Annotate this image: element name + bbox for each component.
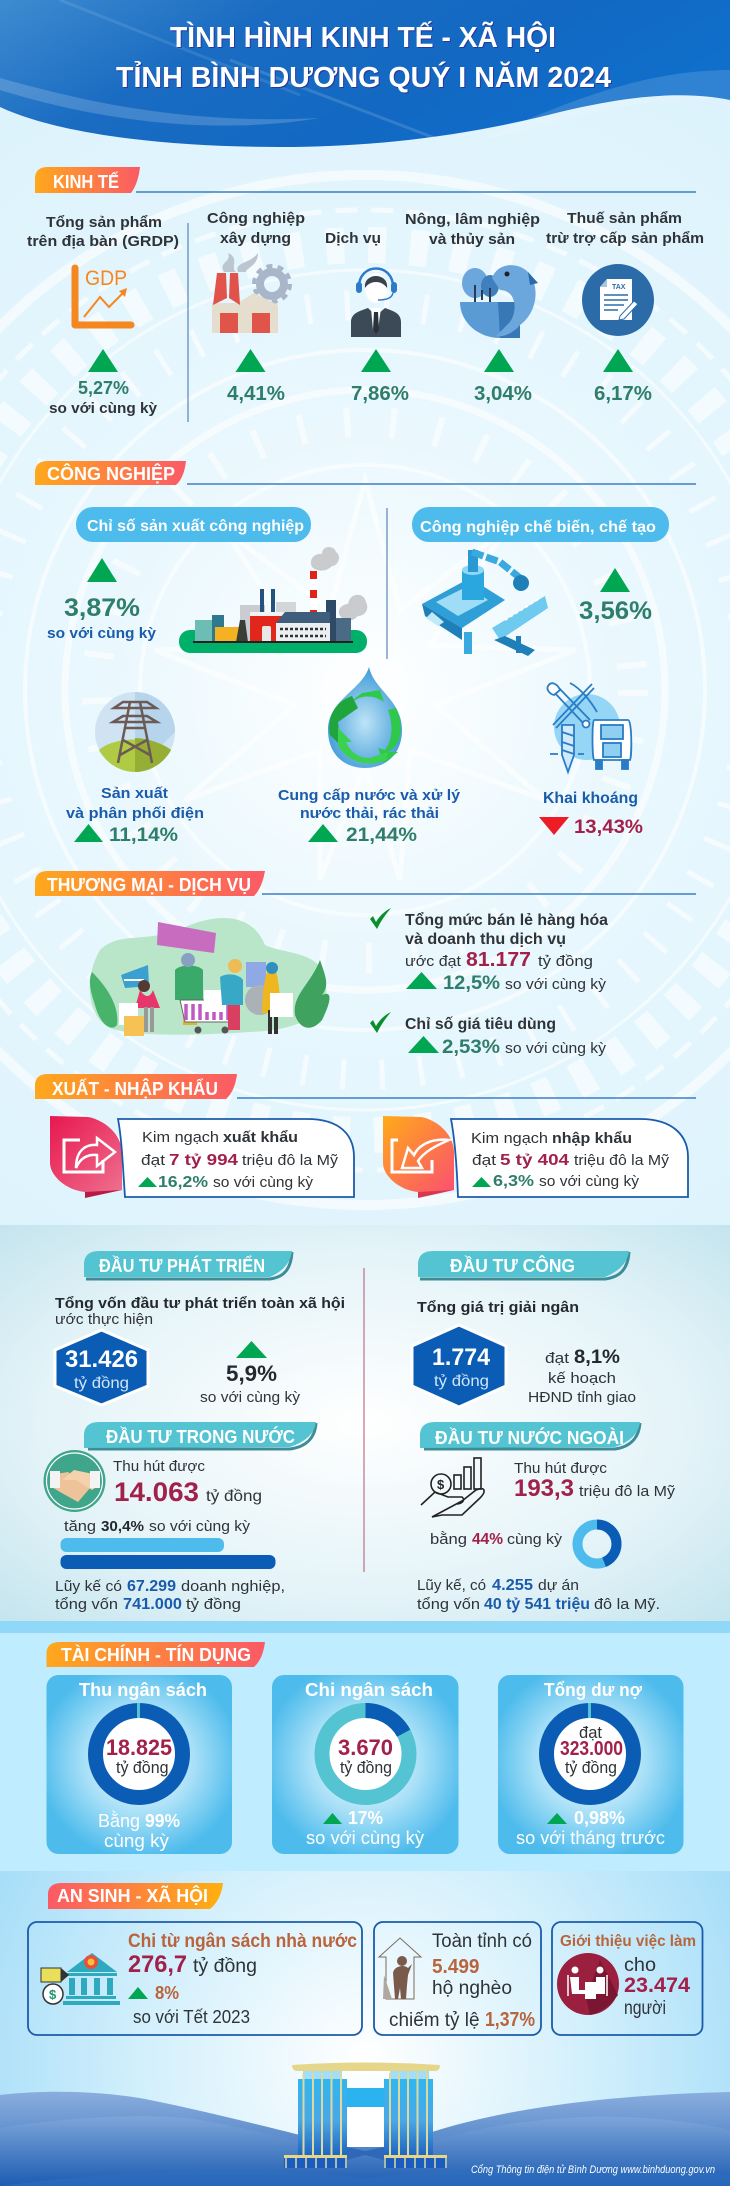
panel: GRDP [27,214,179,417]
panel: bán lẻ: 12,5% [443,973,500,994]
panel: đầu tư nước ngoài: đô la Mỹ. [594,1596,660,1613]
card: chi ngân sách [272,1675,458,1854]
panel: đầu tư trong nước: Thu hút được [113,1458,205,1475]
section heading: THƯƠNG MẠI - DỊCH VỤ [35,871,696,896]
panel: giới thiệu việc làm: 23.474 [624,1974,690,1997]
panel: bán lẻ [370,908,608,994]
panel: nhập khẩu: 5 tỷ 404 [500,1152,569,1169]
panel: công nghiệp chế biến, chế tạo: Công nghiệp chế biến, chế tạo [420,519,656,536]
panel: thuế sản phẩm: 6,17% [594,383,652,405]
donut chart [546,1703,634,1798]
panel: công nghiệp xây dựng: Công nghiệp [207,210,305,227]
panel: bán lẻ: so với cùng kỳ [505,976,607,993]
card: thu ngân sách [46,1675,232,1854]
icon: handshake [44,1450,106,1512]
panel: đầu tư phát triển: Tổng vốn đầu tư phát triển toàn xã hội [55,1295,345,1312]
panel: đầu tư công: đạt [545,1350,570,1367]
panel: khai khoáng [539,683,643,838]
icon: machinery [422,550,548,656]
panel: đầu tư công: 8,1% [574,1347,620,1368]
panel: công nghiệp xây dựng: 4,41% [227,383,285,405]
panel: GRDP: so với cùng kỳ [49,400,158,417]
tab heading: ĐẦU TƯ NƯỚC NGOÀI [435,1427,624,1448]
panel: công nghiệp chế biến, chế tạo: 3,56% [579,597,652,625]
icon: tax document [582,264,654,336]
panel: xuất khẩu: xuất khẩu [223,1129,298,1146]
card: thu ngân sách: 99% [145,1811,180,1831]
panel: thuế sản phẩm: trừ trợ cấp sản phẩm [546,230,704,247]
card: tổng dư nợ: đạt [579,1723,602,1742]
tab heading [418,1251,629,1279]
panel: nông lâm thủy sản: Nông, lâm nghiệp [405,211,540,228]
panel: đầu tư nước ngoài: Lũy kế, có [417,1577,486,1594]
panel: bán lẻ: 81.177 [466,949,531,971]
icon: job interview [557,1953,619,2015]
hills [0,2092,730,2186]
panel: nhập khẩu: nhập khẩu [552,1130,632,1147]
panel: GRDP: trên địa bàn (GRDP) [27,233,179,250]
panel: cung cấp nước [278,667,461,846]
panel: đầu tư background [0,1225,730,1621]
panel: xuất khẩu: đạt [141,1152,166,1169]
panel: nhập khẩu: đạt [472,1152,497,1169]
icon: recycling water drop [328,667,402,768]
panel: chi từ ngân sách: 276,7 [128,1951,187,1978]
panel: đầu tư trong nước: tổng vốn [55,1596,118,1613]
card: thu ngân sách: Bằng [98,1810,140,1831]
panel: đầu tư phát triển: so với cùng kỳ [200,1389,301,1406]
section heading: AN SINH - XÃ HỘI [48,1883,223,1909]
panel: chỉ số sản xuất công nghiệp: so với cùng kỳ [47,625,157,642]
panel: an sinh background [0,1871,730,2186]
icon: money in hand [421,1458,484,1517]
tab heading [84,1251,292,1279]
panel: chỉ số giá tiêu dùng: so với cùng kỳ [505,1040,607,1057]
hexagon value: 31.426 [65,1346,138,1373]
section heading: THƯƠNG MẠI - DỊCH VỤ: THƯƠNG MẠI - DỊCH VỤ [47,875,251,895]
panel: nhập khẩu: Kim ngạch [471,1130,548,1147]
panel: xuất khẩu [50,1116,354,1198]
panel: đầu tư trong nước: 67.299 [127,1578,176,1595]
bar chart [60,1538,276,1569]
panel: đầu tư trong nước: 741.000 [123,1596,182,1613]
panel: chỉ số sản xuất công nghiệp: 3,87% [64,594,140,622]
icon: bank and money [41,1953,120,2005]
icon: industrial skyline [179,547,367,653]
section heading: AN SINH - XÃ HỘI: AN SINH - XÃ HỘI [57,1885,208,1906]
panel: hộ nghèo: 5.499 [432,1956,480,1978]
panel: đầu tư nước ngoài: 193,3 [514,1475,574,1502]
panel: dịch vụ: Dịch vụ [325,230,381,247]
section heading: CÔNG NGHIỆP [35,461,696,485]
panel: giới thiệu việc làm: cho [624,1955,656,1976]
panel: hộ nghèo: Toàn tỉnh có [432,1931,532,1952]
panel: nhập khẩu: 6,3% [493,1173,534,1190]
panel: đầu tư nước ngoài: triệu đô la Mỹ [579,1483,676,1500]
panel: xuất khẩu: Kim ngạch [142,1129,219,1146]
icon: fish and tree [460,265,538,338]
panel: giới thiệu việc làm: người [624,1998,666,2019]
hexagon value: tỷ đồng [434,1373,489,1390]
section heading: XUẤT - NHẬP KHẨU: XUẤT - NHẬP KHẨU [52,1078,218,1099]
panel: đầu tư công: HĐND tỉnh giao [528,1389,636,1406]
panel: sản xuất và phân phối điện: 11,14% [109,825,178,846]
panel: đầu tư nước ngoài: 4.255 [492,1577,533,1594]
icon: check [370,908,391,929]
card: chi ngân sách: so với cùng kỳ [306,1828,424,1848]
panel: đầu tư trong nước: 14.063 [114,1477,199,1507]
panel: khai khoáng: Khai khoáng [543,790,638,807]
title: TỈNH BÌNH DƯƠNG QUÝ I NĂM 2024 [116,60,611,94]
section heading: XUẤT - NHẬP KHẨU [35,1074,696,1099]
panel: thuế sản phẩm: Thuế sản phẩm [567,210,682,227]
panel: công nghiệp xây dựng [207,210,305,405]
panel: xuất khẩu: so với cùng kỳ [213,1174,314,1191]
panel: đầu tư trong nước: tỷ đồng [186,1596,241,1613]
panel: đầu tư công [412,1251,636,1407]
panel: nhập khẩu: triệu đô la Mỹ [574,1152,670,1169]
panel: đầu tư phát triển: ước thực hiện [55,1311,153,1328]
panel: chỉ số sản xuất công nghiệp [47,507,367,653]
donut chart 44% [578,1524,616,1564]
card: tổng dư nợ: Tổng dư nợ [544,1680,642,1700]
panel: nông lâm thủy sản: và thủy sản [429,231,515,248]
panel: đầu tư nước ngoài: tổng vốn [417,1596,480,1613]
panel: bán lẻ: và doanh thu dịch vụ [405,931,566,948]
tab heading: ĐẦU TƯ CÔNG [450,1255,575,1276]
panel: nhập khẩu: so với cùng kỳ [539,1173,640,1190]
header banner [0,0,730,147]
icon: GDP chart: GDP [85,267,127,290]
panel: chi từ ngân sách [28,1922,362,2035]
panel: giới thiệu việc làm [552,1922,702,2035]
panel: công nghiệp xây dựng: xây dựng [220,230,291,247]
icon: call-centre agent [351,268,401,337]
icon: check [370,1012,391,1033]
panel: chỉ số giá tiêu dùng: Chỉ số giá tiêu dùng [405,1016,556,1033]
panel: đầu tư nước ngoài: bằng [430,1531,467,1548]
panel: chi từ ngân sách: so với Tết 2023 [133,2007,250,2027]
panel: đầu tư trong nước: tỷ đồng [206,1488,262,1505]
card: thu ngân sách: 18.825 [106,1735,172,1760]
icon: bank and money: $ [49,1987,57,2002]
panel: đầu tư trong nước: Lũy kế có [55,1578,122,1595]
card: chi ngân sách: tỷ đồng [340,1758,392,1777]
icon: poor household [379,1938,421,1999]
illustration: shoppers [90,918,330,1036]
card: tổng dư nợ: 323.000 [560,1738,623,1760]
panel: đầu tư nước ngoài [417,1422,676,1613]
panel: thuế sản phẩm [546,210,704,405]
card: thu ngân sách: cùng kỳ [104,1831,169,1851]
tab heading [84,1422,316,1449]
icon: mining tools and truck [547,683,631,772]
panel: đầu tư phát triển: 5,9% [226,1361,277,1386]
panel: đầu tư trong nước: 30,4% [101,1518,144,1535]
section heading: TÀI CHÍNH - TÍN DỤNG: TÀI CHÍNH - TÍN DỤNG [61,1644,251,1665]
panel: bán lẻ: tỷ đồng [538,953,593,970]
hexagon value [55,1330,148,1405]
icon: money in hand: $ [437,1477,445,1492]
tab heading: ĐẦU TƯ TRONG NƯỚC [106,1426,295,1447]
card: chi ngân sách: Chi ngân sách [305,1680,433,1700]
card: chi ngân sách: 3.670 [338,1735,393,1760]
panel: hộ nghèo: hộ nghèo [432,1978,512,1999]
panel: xuất khẩu: triệu đô la Mỹ [242,1152,339,1169]
panel: GRDP: Tổng sản phẩm [46,214,162,231]
panel: chỉ số sản xuất công nghiệp: Chỉ số sản xuất công nghiệp [87,518,304,535]
panel: chi từ ngân sách: 8% [155,1983,179,2003]
card: tổng dư nợ: so với tháng trước [516,1828,665,1848]
section heading: KINH TẾ [35,167,696,193]
panel: GRDP: 5,27% [78,378,129,398]
panel: đầu tư công: Tổng giá trị giải ngân [417,1299,579,1316]
hexagon value: 1.774 [432,1344,491,1371]
panel: đầu tư trong nước: so với cùng kỳ [149,1518,251,1535]
icon: tax document: TAX [612,284,626,291]
panel: công nghiệp chế biến, chế tạo [412,507,669,656]
panel: khai khoáng: 13,43% [574,817,643,838]
panel: đầu tư nước ngoài: dự án [538,1577,579,1594]
panel: dịch vụ [325,230,409,405]
panel: cung cấp nước: nước thải, rác thải [300,805,439,822]
card: chi ngân sách: 17% [348,1808,383,1828]
card: thu ngân sách: tỷ đồng [116,1758,168,1777]
card: tổng dư nợ: 0,98% [574,1808,625,1828]
panel: đầu tư nước ngoài: 40 tỷ 541 triệu [484,1596,590,1613]
panel: đầu tư trong nước: tăng [64,1518,96,1535]
panel: giới thiệu việc làm: Giới thiệu việc làm [560,1933,696,1950]
panel: bán lẻ: ước đạt [405,953,462,970]
panel: nông lâm thủy sản: 3,04% [474,383,532,405]
panel: đầu tư trong nước [44,1422,316,1613]
tab heading: ĐẦU TƯ PHÁT TRIỂN [99,1255,265,1276]
panel: nông lâm thủy sản [405,211,540,405]
section heading: KINH TẾ: KINH TẾ [53,171,119,192]
panel: dịch vụ: 7,86% [351,383,409,405]
panel: sản xuất và phân phối điện: Sản xuất [101,785,168,802]
panel: hộ nghèo: 1,37% [485,2009,535,2031]
icon: pylon [95,692,175,772]
panel: đầu tư nước ngoài: 44% [472,1531,503,1548]
panel: tài chính background [0,1621,730,1871]
donut chart 99% [96,1703,182,1798]
card: tổng dư nợ [498,1675,684,1854]
title: TÌNH HÌNH KINH TẾ - XÃ HỘI [170,20,556,54]
panel: chi từ ngân sách: tỷ đồng [193,1956,257,1977]
icon: Binh Duong gate [284,2062,447,2168]
panel: đầu tư nước ngoài: Thu hút được [514,1460,608,1477]
panel: chỉ số giá tiêu dùng: 2,53% [442,1037,500,1058]
panel: nhập khẩu [383,1116,688,1198]
panel: đầu tư phát triển [55,1251,345,1406]
hexagon value [412,1325,506,1407]
page background [0,0,730,1225]
panel: sản xuất và phân phối điện: và phân phối điện [66,805,204,822]
panel: cung cấp nước: Cung cấp nước và xử lý [278,787,461,804]
card: tổng dư nợ: tỷ đồng [565,1758,617,1777]
icon: GDP chart [75,267,131,325]
panel: đầu tư nước ngoài: cùng kỳ [507,1531,563,1548]
donut chart 17% [322,1710,409,1798]
tab heading [420,1422,640,1449]
panel: hộ nghèo [374,1922,541,2035]
panel: bán lẻ: Tổng mức bán lẻ hàng hóa [405,911,608,929]
panel: đầu tư trong nước: doanh nghiệp, [181,1578,285,1595]
panel: sản xuất và phân phối điện [66,692,204,846]
card: thu ngân sách: Thu ngân sách [79,1680,207,1700]
title [116,20,611,94]
watermark: bronze drum pattern [0,175,730,1205]
panel: hộ nghèo: chiếm tỷ lệ [389,2010,480,2031]
panel: chi từ ngân sách: Chi từ ngân sách nhà nước [128,1931,357,1952]
panel: xuất khẩu: 16,2% [158,1174,208,1191]
panel: đầu tư công: kế hoạch [548,1370,616,1387]
section heading: CÔNG NGHIỆP: CÔNG NGHIỆP [47,463,175,484]
hexagon value: tỷ đồng [74,1375,129,1392]
icon: factory [212,253,290,333]
panel: cung cấp nước: 21,44% [346,825,417,846]
panel: chỉ số giá tiêu dùng [370,1012,607,1058]
panel: xuất khẩu: 7 tỷ 994 [169,1152,238,1169]
